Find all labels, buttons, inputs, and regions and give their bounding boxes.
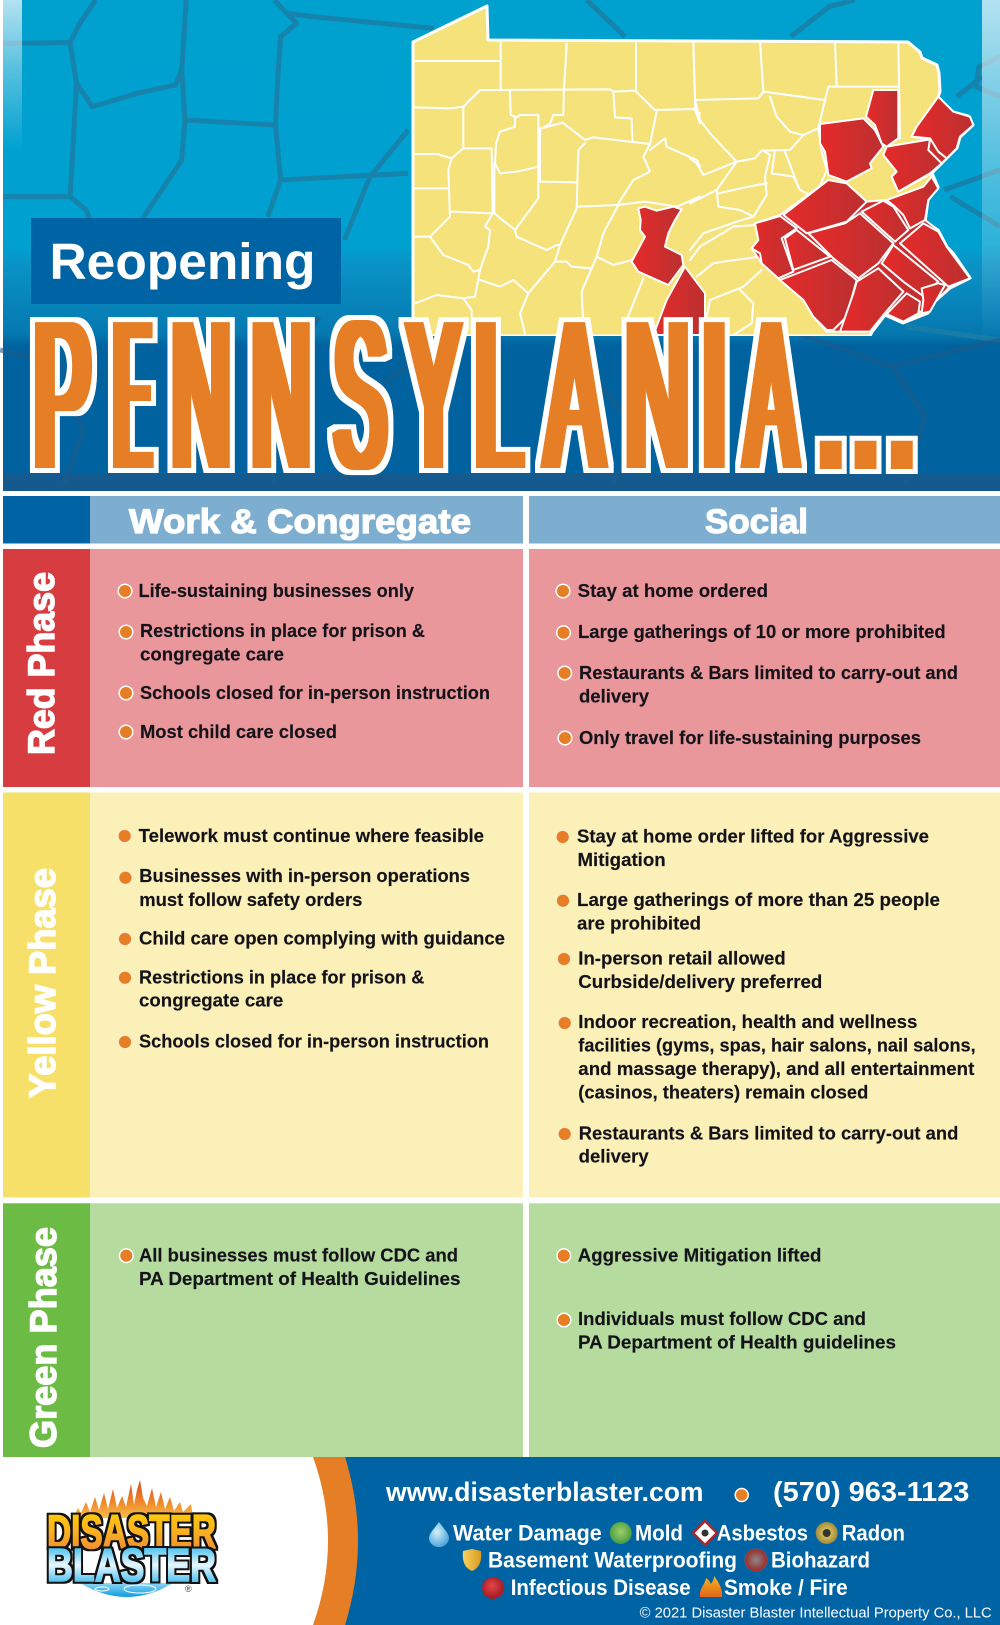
list: red work: Restrictions in place for prison & xyxy=(140,620,425,641)
panel: yellow phase xyxy=(3,792,1000,1198)
list: yellow social: are prohibited xyxy=(577,912,701,933)
list: green work: PA Department of Health Guidelines xyxy=(139,1268,460,1289)
footer blue panel xyxy=(345,1457,1000,1625)
red block southeast xyxy=(752,177,970,332)
list: yellow work xyxy=(118,825,505,1051)
western county borders xyxy=(413,42,705,335)
list: green social xyxy=(557,1245,896,1352)
list: yellow social: facilities (gyms, spas, hair salons, nail salons, xyxy=(578,1035,976,1056)
title: PENNSYLANIA...: ... xyxy=(821,298,912,510)
title: PENNSYLANIA...: P xyxy=(34,278,91,514)
list: green social: Individuals must follow CDC and xyxy=(578,1308,866,1329)
footer xyxy=(47,1457,1000,1625)
list: red work: Schools closed for in-person instruction xyxy=(140,682,490,703)
logo flames xyxy=(73,1480,193,1518)
copyright: © 2021 Disaster Blaster Intellectual Property Co., LLC xyxy=(640,1606,992,1622)
column header bar xyxy=(3,496,1000,544)
header banner xyxy=(0,0,1000,491)
heading: Work & Congregate: Work & Congregate xyxy=(129,503,471,541)
title: PENNSYLANIA... xyxy=(34,275,912,514)
list: yellow social: Mitigation xyxy=(578,849,666,870)
list: red work xyxy=(118,580,490,742)
list: green work xyxy=(120,1245,460,1289)
red county m xyxy=(882,245,938,295)
list: yellow work: Telework must continue where feasible xyxy=(139,825,484,846)
logo word: Disaster: DISASTER xyxy=(47,1505,216,1558)
list: yellow work: Child care open complying with guidance xyxy=(139,927,505,948)
red county k xyxy=(862,201,908,242)
service: smoke and fire: Smoke / Fire xyxy=(724,1575,848,1600)
list: yellow social: Stay at home order lifted for Aggressive xyxy=(577,825,929,846)
orange curve xyxy=(313,1457,358,1625)
list: yellow social: Curbside/delivery preferred xyxy=(578,971,822,992)
list: yellow social: Restaurants & Bars limited to carry-out and xyxy=(579,1122,958,1143)
red county b xyxy=(820,118,883,182)
logo word: Blaster: BLASTER xyxy=(47,1539,216,1591)
list: yellow social: (casinos, theaters) remain closed xyxy=(578,1082,868,1103)
label: Yellow Phase: Yellow Phase xyxy=(22,868,63,1098)
heading: Social: Social xyxy=(705,503,808,541)
title: PENNSYLANIA...: S xyxy=(334,277,386,513)
list: red social: Stay at home ordered xyxy=(578,580,768,601)
service: basement waterproofing: Basement Waterproofing xyxy=(488,1547,737,1572)
list: red social: Large gatherings of 10 or more prohibited xyxy=(578,621,946,642)
list: red work: Most child care closed xyxy=(140,721,337,742)
red county south xyxy=(653,267,705,335)
map of Pennsylvania counties xyxy=(413,6,973,336)
service: mold: Mold xyxy=(635,1521,683,1546)
list: yellow social: In-person retail allowed xyxy=(578,947,786,968)
red block northeast xyxy=(883,97,973,192)
list: red work: congregate care xyxy=(140,644,284,665)
title: PENNSYLANIA...: N xyxy=(252,278,310,514)
title: PENNSYLANIA...: Y xyxy=(408,275,460,513)
red county o xyxy=(887,293,920,322)
list: yellow social: and massage therapy), and all entertainment xyxy=(578,1058,974,1079)
services list xyxy=(429,1521,905,1600)
title: PENNSYLANIA...: N xyxy=(172,278,230,514)
list: yellow work: Restrictions in place for prison & xyxy=(139,966,424,987)
list: green social: PA Department of Health guidelines xyxy=(578,1331,896,1352)
website: www.disasterblaster.com xyxy=(385,1477,704,1507)
list: green work: All businesses must follow CDC and xyxy=(139,1245,458,1266)
list: red social: Only travel for life-sustaining purposes xyxy=(579,727,921,748)
red county a xyxy=(866,90,898,147)
icon: biohazard xyxy=(744,1548,768,1572)
title: PENNSYLANIA...: A xyxy=(746,276,796,513)
red county n xyxy=(840,268,903,332)
icon: asbestos xyxy=(693,1521,717,1545)
title: PENNSYLANIA...: N xyxy=(625,277,689,514)
list: red social: delivery xyxy=(579,686,650,707)
service: biohazard: Biohazard xyxy=(771,1547,870,1572)
list: yellow work: Schools closed for in-person instruction xyxy=(139,1030,489,1051)
eastern county borders xyxy=(690,42,973,335)
list: yellow work: Businesses with in-person operations xyxy=(139,865,470,886)
icon: water drop xyxy=(429,1522,449,1547)
label: Green Phase: Green Phase xyxy=(23,1227,64,1448)
state shape xyxy=(413,6,973,336)
title: PENNSYLANIA...: L xyxy=(475,278,522,514)
icon: shield xyxy=(463,1549,481,1571)
list: yellow social xyxy=(556,825,976,1167)
subtitle: Reopening: Reopening xyxy=(50,233,316,290)
subtitle: Reopening xyxy=(31,218,341,304)
red county i xyxy=(780,260,857,330)
title: PENNSYLANIA...: I xyxy=(701,276,728,513)
title: PENNSYLANIA...: A xyxy=(546,278,603,514)
list: yellow social: delivery xyxy=(579,1146,649,1167)
red county l xyxy=(900,223,970,287)
list: yellow work: congregate care xyxy=(139,990,283,1011)
red county west xyxy=(632,207,683,285)
icon: radon xyxy=(816,1522,838,1544)
list: red work: Life-sustaining businesses only xyxy=(138,580,415,601)
contact bullet xyxy=(735,1488,748,1502)
icon: mold xyxy=(610,1522,632,1544)
panel: red phase xyxy=(3,549,1000,787)
logo registered mark: ® xyxy=(185,1584,192,1594)
phone: (570) 963-1123 xyxy=(773,1476,969,1507)
logo puddle xyxy=(80,1583,173,1597)
list: red social: Restaurants & Bars limited to carry-out and xyxy=(579,662,958,683)
red county p xyxy=(922,283,945,313)
red county c xyxy=(912,97,973,158)
list: yellow social: Large gatherings of more than 25 people xyxy=(577,889,940,910)
logo: Disaster Blaster xyxy=(47,1480,216,1597)
red county h xyxy=(785,230,830,270)
panel: green phase xyxy=(3,1203,1000,1457)
red county f xyxy=(783,180,867,233)
list: yellow social: Indoor recreation, health and wellness xyxy=(578,1011,917,1032)
service: infectious disease: Infectious Disease xyxy=(511,1575,691,1600)
red county j xyxy=(808,213,893,278)
list: green social: Aggressive Mitigation lifted xyxy=(578,1245,821,1266)
icon: flame xyxy=(700,1576,722,1597)
list: red social xyxy=(556,580,958,748)
title: PENNSYLANIA...: E xyxy=(115,276,150,513)
list: yellow work: must follow safety orders xyxy=(139,889,362,910)
red county e xyxy=(887,177,938,228)
icon: virus xyxy=(482,1578,504,1598)
red county d xyxy=(883,139,942,192)
label: Red Phase: Red Phase xyxy=(21,572,62,755)
red county g xyxy=(752,216,797,278)
service: water damage: Water Damage xyxy=(453,1521,602,1546)
service: radon: Radon xyxy=(842,1521,905,1546)
service: asbestos: Asbestos xyxy=(717,1521,808,1546)
